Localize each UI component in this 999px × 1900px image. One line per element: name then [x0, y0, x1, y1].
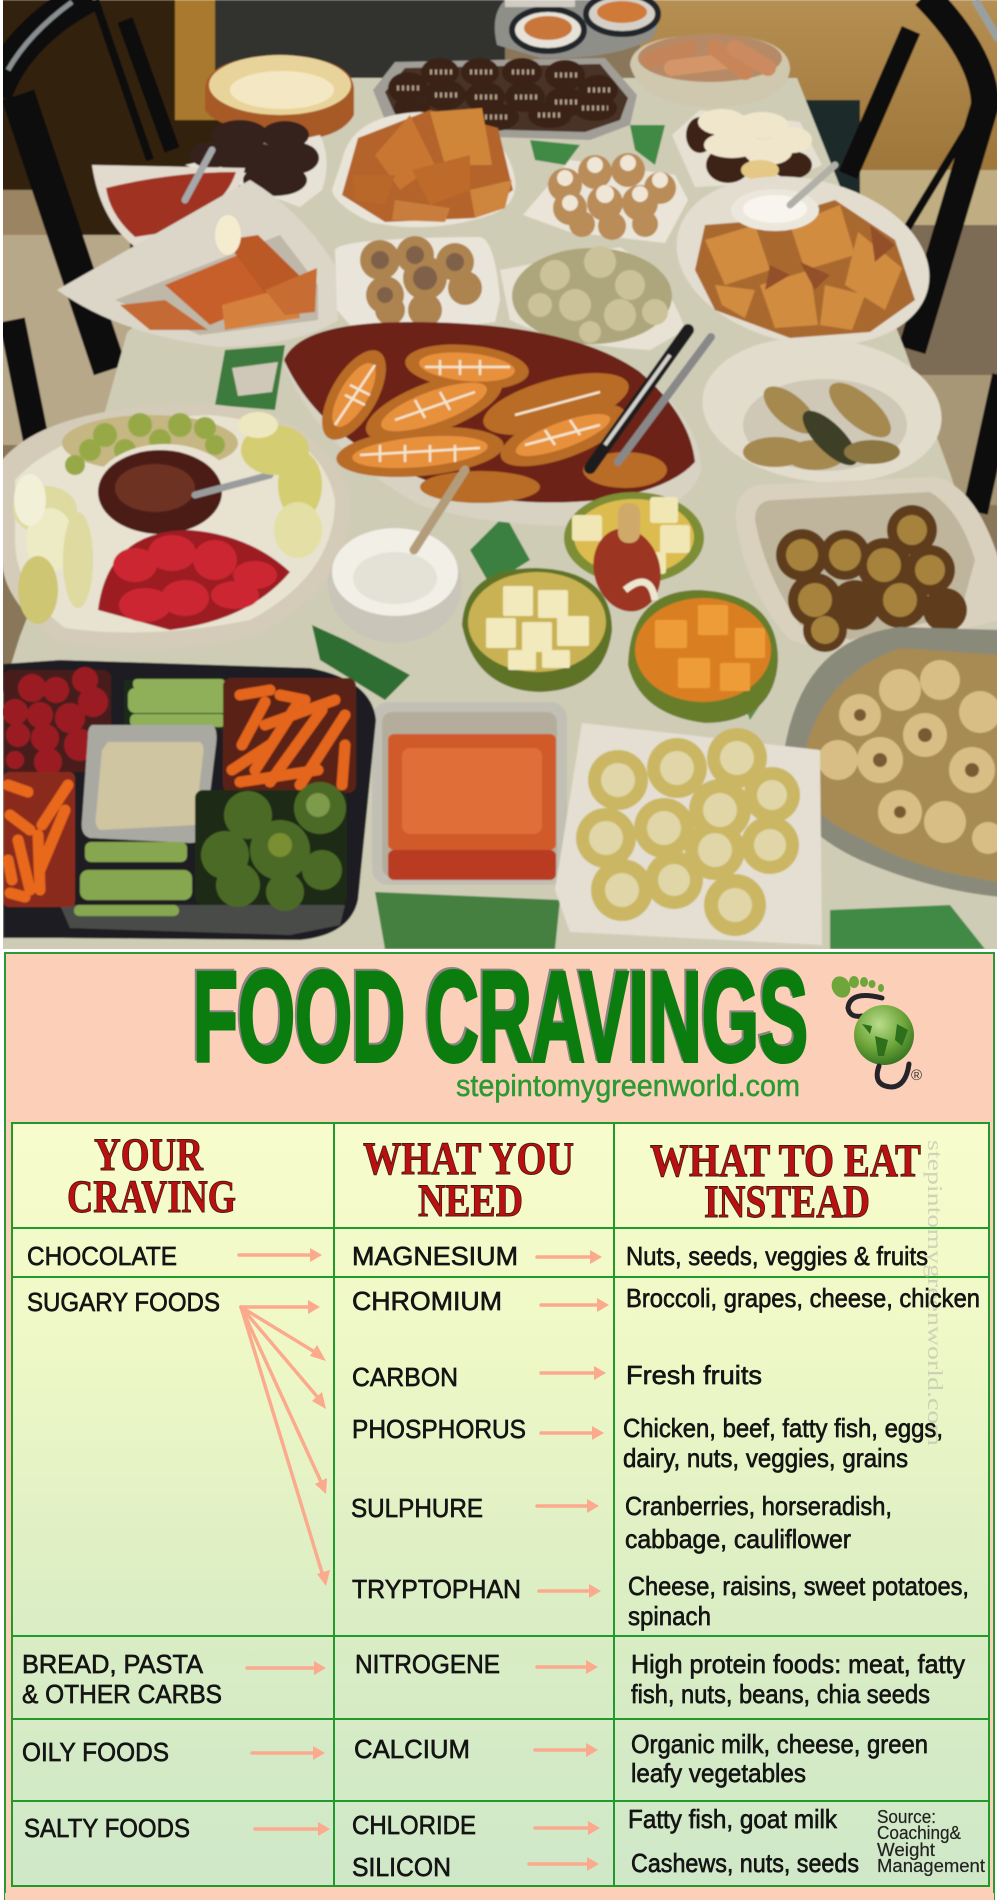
row: salty foods: Cashews, nuts, seeds: [631, 1848, 859, 1878]
white dip bowl with spoon: [328, 470, 465, 643]
row: bread, pasta and carbs: fish, nuts, beans, chia seeds: [631, 1679, 930, 1709]
table grid lines: [12, 1123, 989, 1886]
row: sugary foods: SULPHURE: [351, 1493, 483, 1523]
row: oily foods: [22, 1729, 928, 1788]
dumpling plate: [500, 246, 685, 350]
tablecloth: [0, 78, 999, 950]
cheese bowls: [462, 492, 778, 723]
cupcakes plate: [672, 109, 822, 187]
source credit: Coaching&: [877, 1823, 961, 1843]
row: salty foods: SALTY FOODS: [24, 1813, 190, 1843]
row: oily foods: OILY FOODS: [22, 1737, 169, 1767]
row: sugary foods: Cranberries, horseradish,: [625, 1491, 892, 1521]
row: oily foods: Organic milk, cheese, green: [631, 1729, 928, 1759]
row: sugary foods: spinach: [628, 1601, 711, 1631]
white pastry bowl: [57, 180, 338, 347]
chocolate football tray: [373, 58, 637, 140]
heading: what you need: WHAT YOU: [363, 1133, 574, 1185]
row: salty foods: SILICON: [352, 1852, 451, 1882]
row: sugary foods: PHOSPHORUS: [352, 1414, 526, 1444]
icon: footprint globe logo: ®: [911, 1067, 922, 1084]
row: oily foods: leafy vegetables: [631, 1758, 806, 1788]
heading: your craving: [67, 1129, 236, 1223]
row: salty foods: [24, 1804, 859, 1882]
red sauce bowl: [92, 150, 245, 247]
heading: what you need: [363, 1133, 574, 1227]
fruit and dip tray: [3, 404, 336, 633]
icon: footprint globe logo: [828, 973, 922, 1087]
source credit: Management: [877, 1856, 985, 1876]
row: chocolate: CHOCOLATE: [27, 1241, 177, 1271]
heading: what to eat instead: [650, 1135, 921, 1228]
source credit: Source:: [877, 1807, 936, 1827]
row: bread, pasta and carbs: NITROGENE: [355, 1649, 500, 1679]
room background: [3, 0, 997, 694]
heading: your craving: CRAVING: [67, 1171, 236, 1223]
salsa glass dish: [372, 702, 567, 885]
row: sugary foods: TRYPTOPHAN: [352, 1574, 521, 1604]
white dish of grilled slices: [736, 477, 999, 657]
row: bread, pasta and carbs: High protein foods: meat, fatty: [631, 1649, 965, 1679]
table background: [12, 1123, 989, 1886]
pinwheel plate: [555, 723, 822, 945]
row: chocolate: [27, 1241, 928, 1271]
row: sugary foods: CARBON: [352, 1362, 458, 1392]
row: bread, pasta and carbs: [22, 1649, 965, 1709]
row: salty foods: CHLORIDE: [352, 1810, 476, 1840]
row: salty foods: Fatty fish, goat milk: [628, 1804, 838, 1834]
veggie platter: [2, 660, 376, 940]
football shaped bowl with potato skins: [284, 322, 701, 526]
heading: what to eat instead: WHAT TO EAT: [650, 1135, 921, 1187]
chairs: [0, 0, 999, 512]
row: sugary foods: cabbage, cauliflower: [625, 1524, 851, 1554]
brownie plate: [185, 120, 327, 207]
football mascot ornament: [592, 502, 662, 612]
zucchini bowl: [702, 340, 942, 482]
big bowl of wontons: [676, 160, 931, 343]
row: sugary foods: dairy, nuts, veggies, grains: [623, 1443, 908, 1473]
photo: party food table spread: [0, 0, 999, 950]
top tray with small bowls: [495, 0, 658, 58]
serving tongs: [590, 330, 711, 468]
row: sugary foods: [27, 1283, 980, 1631]
panel: food cravings chart background: [0, 949, 999, 1900]
mini cupcakes plate: [523, 153, 688, 243]
source credit: Weight: [877, 1840, 935, 1860]
row: sugary foods: Cheese, raisins, sweet potatoes,: [628, 1571, 969, 1601]
row: bread, pasta and carbs: BREAD, PASTA: [22, 1649, 204, 1679]
row: chocolate: MAGNESIUM: [352, 1241, 518, 1271]
orange pastry plate: [332, 108, 515, 227]
row: sugary foods: Fresh fruits: [626, 1360, 762, 1390]
cheesecake: [205, 55, 354, 140]
heading: your craving: YOUR: [94, 1129, 204, 1181]
row: sugary foods: SUGARY FOODS: [27, 1287, 220, 1317]
heading: what to eat instead: INSTEAD: [704, 1176, 870, 1228]
row: oily foods: CALCIUM: [354, 1734, 470, 1764]
watermark: vertical site name: stepintomygreenworld.com: [923, 1140, 947, 1446]
row: sugary foods: CHROMIUM: [352, 1286, 502, 1316]
source credit: [877, 1807, 985, 1876]
bowl of spring rolls: [629, 34, 791, 84]
website address: stepintomygreenworld.com: [456, 1068, 800, 1103]
row: bread, pasta and carbs: & OTHER CARBS: [22, 1679, 222, 1709]
heading: what you need: NEED: [418, 1175, 523, 1227]
row: chocolate: Nuts, seeds, veggies & fruits: [626, 1241, 928, 1271]
table: craving chart: [12, 1123, 989, 1886]
tart plate: [335, 236, 500, 327]
glass bowl of pasta: [781, 627, 999, 897]
arrows: sugary foods fan: [241, 1300, 330, 1586]
row: sugary foods: Chicken, beef, fatty fish, eggs,: [623, 1413, 943, 1443]
